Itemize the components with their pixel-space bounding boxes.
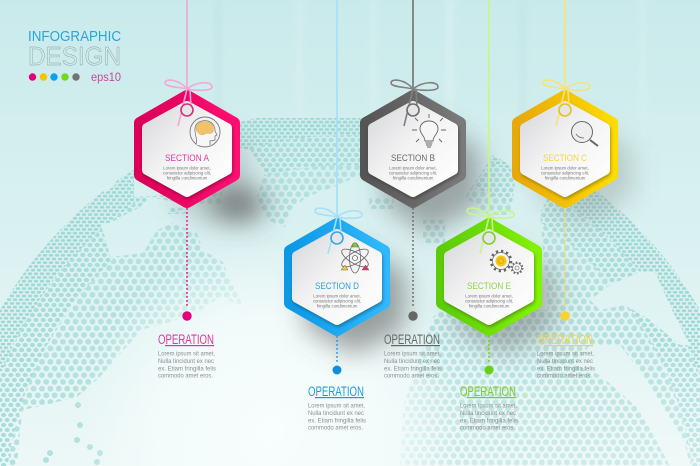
node dot D [332,366,342,374]
hexagon card C [525,106,605,192]
bottom fade overlay [0,200,700,466]
title block [28,28,121,84]
text block: operation A: Nulla tincidunt ex nec [158,358,214,365]
hanging string D [336,0,338,219]
section D text: fringilla condimentum [317,304,358,308]
text block: operation E: ex. Etiam fringilla felis [460,418,518,424]
section A text: fringilla condimentum [167,176,208,180]
icon: head with brain [190,117,220,147]
dotted connector E [488,336,490,363]
dotted connector D [336,336,338,363]
text block: operation E: OPERATION [460,384,516,399]
lower right map fade [380,340,700,466]
dotted connector A [186,208,188,307]
text block: operation C: OPERATION [537,332,593,347]
dotted world map globe [0,100,700,466]
text block: operation B: ex. Etiam fringilla felis [384,366,442,372]
panel: section D [290,0,384,374]
text block: operation C: Nulla tincidunt ex nec [537,358,593,365]
section E text: consetetur adipiscing elit, [465,298,513,304]
title: design: DESIGN [28,41,121,71]
background paper folds [216,0,646,290]
section B heading: SECTION B [391,153,435,164]
bow and ring B [391,80,438,126]
text block: operation D: Nulla tincidunt ex nec [308,410,364,417]
bow and ring E [467,208,514,254]
hanging string A [186,0,188,91]
hexagon frame E [442,224,536,330]
node dot E [484,366,494,374]
section C text: fringilla condimentum [545,176,586,180]
section D text [313,294,361,308]
hexagon card D [297,234,377,320]
text block: operation D: ex. Etiam fringilla felis [308,418,366,424]
text block: operation C [537,332,595,380]
icon: atom [339,243,371,273]
hexagon shadows [170,120,632,355]
text block: operation C: ex. Etiam fringilla felis [537,366,595,372]
bow and ring C [543,80,590,126]
text block: operation E: Nulla tincidunt ex nec [460,410,516,417]
section A text [163,166,211,180]
dotted connector B [412,208,414,307]
title: infographic: INFOGRAPHIC [28,28,121,45]
panel: section C [518,0,612,321]
hanging string B [412,0,414,91]
hexagon frame A [140,96,234,202]
hexagon card A [147,106,227,192]
section C text: consetetur adipiscing elit, [541,170,589,176]
section D text: Lorem ipsum dolor amet, [313,294,361,298]
icon: magnifier [572,122,598,146]
text block: operation B: commodo amet eros. [384,372,439,380]
section A text: Lorem ipsum dolor amet, [163,166,211,170]
section D text: consetetur adipiscing elit, [313,298,361,304]
hexagon frame B [366,96,460,202]
text block: operation D: commodo amet eros. [308,424,363,432]
text block: operation D: OPERATION [308,384,364,399]
eps10 label: eps10 [91,70,121,84]
text block: operation E: commodo amet eros. [460,424,515,432]
section C heading: SECTION C [543,153,587,164]
icon: gears [491,251,522,274]
hanging string C [564,0,566,91]
section C text [541,166,589,180]
section E heading: SECTION E [467,281,511,292]
text block: operation C: Lorem ipsum sit amet, [537,350,594,358]
dotted connector C [564,208,566,307]
text block: operation D [308,384,366,432]
text block: operation B: Lorem ipsum sit amet, [384,350,441,358]
section C text: Lorem ipsum dolor amet, [541,166,589,170]
section A text: consetetur adipiscing elit, [163,170,211,176]
text block: operation A: Lorem ipsum sit amet, [158,350,215,358]
panel: section B [366,0,460,321]
text block: operation A: commodo amet eros. [158,372,213,380]
node dot A [182,311,192,321]
section A heading: SECTION A [165,153,210,164]
section B text [389,166,437,180]
bow and ring D [315,208,362,254]
text block: operation B: Nulla tincidunt ex nec [384,358,440,365]
text block: operation A: ex. Etiam fringilla felis [158,366,216,372]
hexagon frame D [290,224,384,330]
text block: operation A: OPERATION [158,332,214,347]
hexagon card B [373,106,453,192]
node dot C [560,311,570,321]
section B text: consetetur adipiscing elit, [389,170,437,176]
hexagon frame C [518,96,612,202]
section E text: fringilla condimentum [469,304,510,308]
text block: operation B: OPERATION [384,332,440,347]
text block: operation D: Lorem ipsum sit amet, [308,402,365,410]
section B text: fringilla condimentum [393,176,434,180]
text block: operation E: Lorem ipsum sit amet, [460,402,517,410]
text block: operation E [460,384,518,432]
icon: light bulb [412,114,446,147]
text block: operation A [158,332,216,380]
node dot B [408,311,418,321]
section E text: Lorem ipsum dolor amet, [465,294,513,298]
section D heading: SECTION D [315,281,359,292]
text block: operation B [384,332,442,380]
hexagon card E [449,234,529,320]
section E text [465,294,513,308]
colour dots [29,73,80,81]
hanging string E [488,0,490,219]
bow and ring A [165,80,212,126]
panel: section A [140,0,234,321]
panel: section E [442,0,536,374]
section B text: Lorem ipsum dolor amet, [389,166,437,170]
text block: operation C: commodo amet eros. [537,372,592,380]
